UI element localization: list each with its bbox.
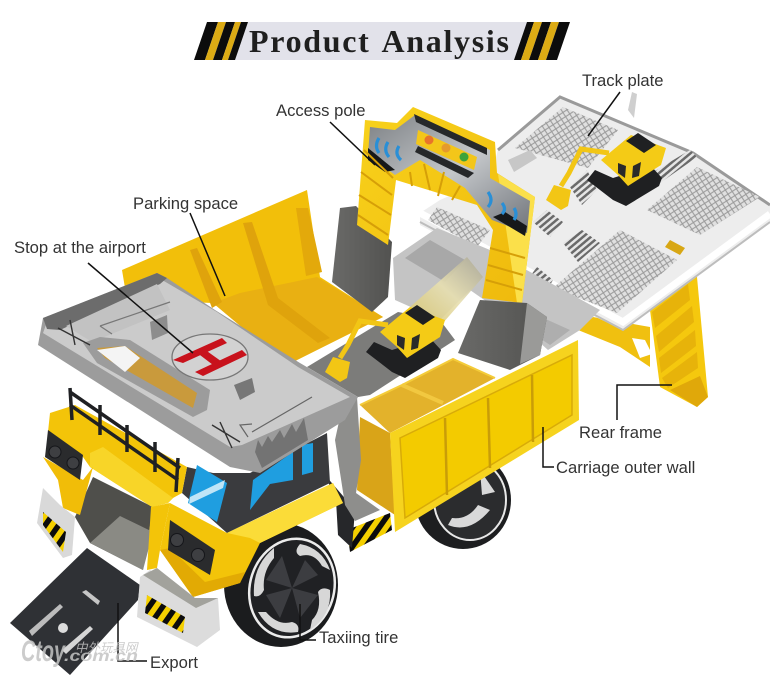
- blue arrows: [376, 138, 516, 220]
- label: Rear frame: [579, 385, 672, 442]
- label: Export: [118, 603, 198, 672]
- carriage outer wall: [390, 340, 579, 532]
- label: Stop at the airport: Stop at the airport: [14, 238, 146, 257]
- grate panels: [428, 107, 760, 313]
- excavator on track plate: [546, 133, 666, 210]
- excavator on road: [325, 305, 445, 382]
- watermark: Ctoy: [21, 635, 66, 668]
- label: Carriage outer wall: [543, 427, 695, 477]
- title banner: [194, 22, 570, 60]
- front wheel: [224, 523, 347, 649]
- road stripes: [525, 92, 697, 297]
- label: Stop at the airport: [14, 238, 193, 353]
- roof rail: [70, 388, 180, 492]
- label: Export: Export: [150, 653, 198, 672]
- label: Rear frame: Rear frame: [579, 423, 662, 442]
- metal sign panel: [368, 115, 530, 233]
- yellow front body: [43, 405, 343, 597]
- leg ribs: [358, 150, 525, 290]
- helipad red H: [173, 338, 247, 376]
- export ramp: [10, 548, 140, 675]
- label: Carriage outer wall: Carriage outer wall: [556, 458, 695, 477]
- headlights left: [45, 430, 83, 480]
- watermark: [21, 635, 139, 668]
- label: Track plate: Track plate: [582, 71, 663, 90]
- label: Access pole: Access pole: [276, 101, 365, 120]
- label: Access pole: [276, 101, 375, 165]
- dark chassis behind fender: [325, 475, 355, 548]
- left bumper: [37, 488, 75, 558]
- roof deck: [38, 273, 358, 473]
- parking space: [122, 190, 383, 365]
- right bumper: [137, 568, 220, 647]
- title banner: Product Analysis: [249, 23, 511, 59]
- label: Track plate: [582, 71, 663, 136]
- roof opening: [83, 337, 210, 417]
- cab: [182, 433, 330, 533]
- label: Parking space: Parking space: [133, 194, 238, 213]
- watermark: .com.cn: [64, 648, 138, 665]
- loading bay opening: [75, 477, 153, 570]
- hazard stripes under carriage: [347, 513, 392, 552]
- central deck frame: [393, 228, 600, 350]
- label: Taxiing tire: [300, 604, 398, 647]
- rear frame: [578, 270, 708, 407]
- label: Parking space: [133, 194, 238, 296]
- track plate: [420, 92, 770, 330]
- headlights right: [168, 520, 215, 575]
- gray pillar left: [332, 206, 392, 312]
- road surface: [307, 312, 455, 397]
- label: Taxiing tire: Taxiing tire: [319, 628, 398, 647]
- translucent slide ramp: [410, 257, 483, 323]
- traffic light bar: [416, 130, 477, 170]
- rear wheel: [415, 451, 511, 549]
- rim spokes: [254, 544, 330, 633]
- gray pillar right: [458, 300, 547, 370]
- carriage: [357, 340, 579, 532]
- gray support column: [335, 397, 380, 521]
- helipad circle: [172, 334, 248, 380]
- watermark: 中外玩具网: [75, 641, 139, 655]
- access pole arch: [357, 107, 535, 303]
